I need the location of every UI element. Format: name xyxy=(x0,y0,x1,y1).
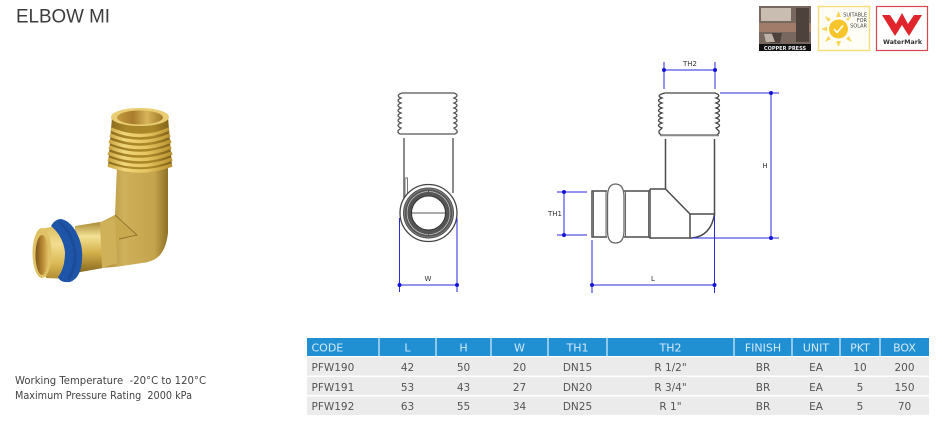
table row: PFW192 xyxy=(307,396,929,415)
drawing: side view xyxy=(592,93,720,243)
dimension: H xyxy=(692,91,779,240)
table row: PFW192: 55 xyxy=(457,401,470,413)
thread opening xyxy=(111,108,169,126)
table row: PFW192: PFW192 xyxy=(312,401,354,413)
dimension: TH1 xyxy=(547,190,587,237)
table row: PFW192: DN25 xyxy=(563,401,592,413)
blue ring xyxy=(51,219,82,282)
table row: PFW191: EA xyxy=(809,382,824,394)
table row: PFW190: 200 xyxy=(894,362,915,374)
icon: copper press badge: COPPER PRESS xyxy=(764,46,806,52)
socket opening xyxy=(36,235,48,275)
icon: copper press badge xyxy=(759,6,811,52)
table header xyxy=(307,338,929,356)
table header: BOX xyxy=(893,342,916,354)
text block: ratings: Maximum Pressure Rating 2000 kPa xyxy=(15,390,192,402)
thread xyxy=(398,93,457,134)
table row: PFW191: 27 xyxy=(513,382,526,394)
icon: suitable for solar badge: FOR xyxy=(857,18,868,24)
table row: PFW190: 10 xyxy=(853,362,867,374)
table row: PFW192: 63 xyxy=(401,401,414,413)
bead xyxy=(608,184,624,243)
table row: PFW190: 50 xyxy=(457,362,470,374)
socket front tube xyxy=(40,225,70,279)
table header: CODE xyxy=(312,342,343,354)
dimension: H: H xyxy=(762,162,768,170)
table: product specifications xyxy=(307,338,929,415)
table row: PFW191: 53 xyxy=(401,382,414,394)
table row: PFW192: 34 xyxy=(513,401,526,413)
table row: PFW190: BR xyxy=(756,362,770,374)
table header: TH1 xyxy=(566,342,588,354)
table row: PFW190: PFW190 xyxy=(312,362,354,374)
table row: PFW190: DN15 xyxy=(563,362,592,374)
table header: TH2 xyxy=(658,342,682,354)
dimension: TH1: TH1 xyxy=(547,210,562,218)
dimension: L: L xyxy=(651,275,655,283)
table header: W xyxy=(514,342,525,354)
dimension: L xyxy=(590,216,716,293)
icon: WaterMark badge xyxy=(876,6,928,50)
dimension: W: W xyxy=(425,275,432,283)
table row: PFW190: EA xyxy=(809,362,824,374)
socket tube xyxy=(75,222,103,273)
icon: WaterMark badge: WaterMark xyxy=(883,38,923,46)
table row: PFW190 xyxy=(307,357,929,376)
body xyxy=(404,138,453,198)
table row: PFW192: EA xyxy=(809,401,824,413)
dimension: TH2: TH2 xyxy=(682,60,697,68)
elbow outline xyxy=(650,139,714,238)
table header: FINISH xyxy=(745,342,781,354)
socket rim xyxy=(32,228,52,278)
socket xyxy=(592,191,650,237)
title: ELBOW MI xyxy=(16,6,110,28)
table header: L xyxy=(404,342,411,354)
icon: suitable for solar badge xyxy=(818,6,870,50)
table row: PFW190: 20 xyxy=(513,362,526,374)
product photo: brass elbow xyxy=(32,108,172,282)
table header: PKT xyxy=(850,342,870,354)
table row: PFW192: R 1" xyxy=(659,401,682,413)
table row: PFW191: 5 xyxy=(857,382,863,394)
table row: PFW190: 42 xyxy=(401,362,414,374)
dimension: W xyxy=(398,218,459,292)
thread xyxy=(658,93,720,135)
table row: PFW192: 5 xyxy=(857,401,863,413)
table header: UNIT xyxy=(803,342,829,354)
table row: PFW191: BR xyxy=(756,382,770,394)
table row: PFW191: R 3/4" xyxy=(654,382,687,394)
text block: ratings xyxy=(15,375,206,402)
table row: PFW191: 43 xyxy=(457,382,470,394)
table header: H xyxy=(459,342,468,354)
icon: suitable for solar badge: SOLAR xyxy=(850,24,868,30)
dimension: TH2 xyxy=(662,60,717,89)
text block: ratings: Working Temperature -20°C to 120°C xyxy=(15,375,206,387)
end circle xyxy=(400,184,457,242)
male thread xyxy=(108,117,172,172)
elbow body xyxy=(100,165,168,268)
table row: PFW192: 70 xyxy=(898,401,911,413)
table row: PFW191: DN20 xyxy=(563,382,592,394)
table row: PFW190: R 1/2" xyxy=(654,362,687,374)
table row: PFW191 xyxy=(307,377,929,395)
table row: PFW192: BR xyxy=(756,401,770,413)
table row: PFW191: 150 xyxy=(894,382,915,394)
icon: suitable for solar badge: SUITABLE xyxy=(843,12,867,18)
table row: PFW191: PFW191 xyxy=(312,382,354,394)
drawing: front view xyxy=(398,93,457,242)
